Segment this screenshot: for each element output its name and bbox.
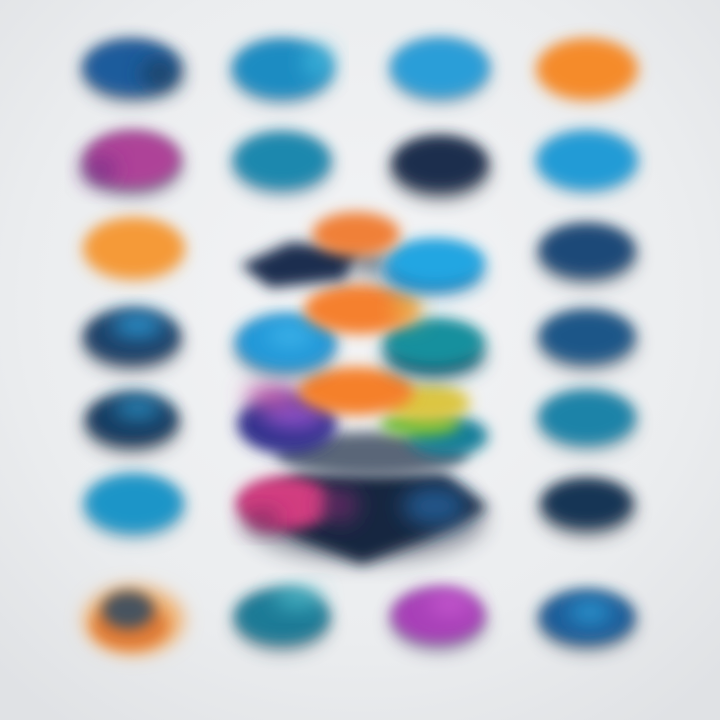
dark lower diamond <box>236 474 488 564</box>
row 5 side ovals <box>85 390 636 453</box>
central stacked diamonds <box>236 212 488 564</box>
multicolour layer <box>237 367 488 456</box>
row 6 side ovals <box>85 474 634 539</box>
row 4 centre layer <box>236 284 484 378</box>
row 4 side ovals <box>83 310 636 371</box>
row 1 ovals <box>83 38 637 104</box>
grey band <box>276 432 468 476</box>
row 2 ovals <box>83 131 637 200</box>
row 7 ovals <box>84 586 635 654</box>
top layer <box>240 212 484 294</box>
row 3 side ovals <box>84 218 636 285</box>
